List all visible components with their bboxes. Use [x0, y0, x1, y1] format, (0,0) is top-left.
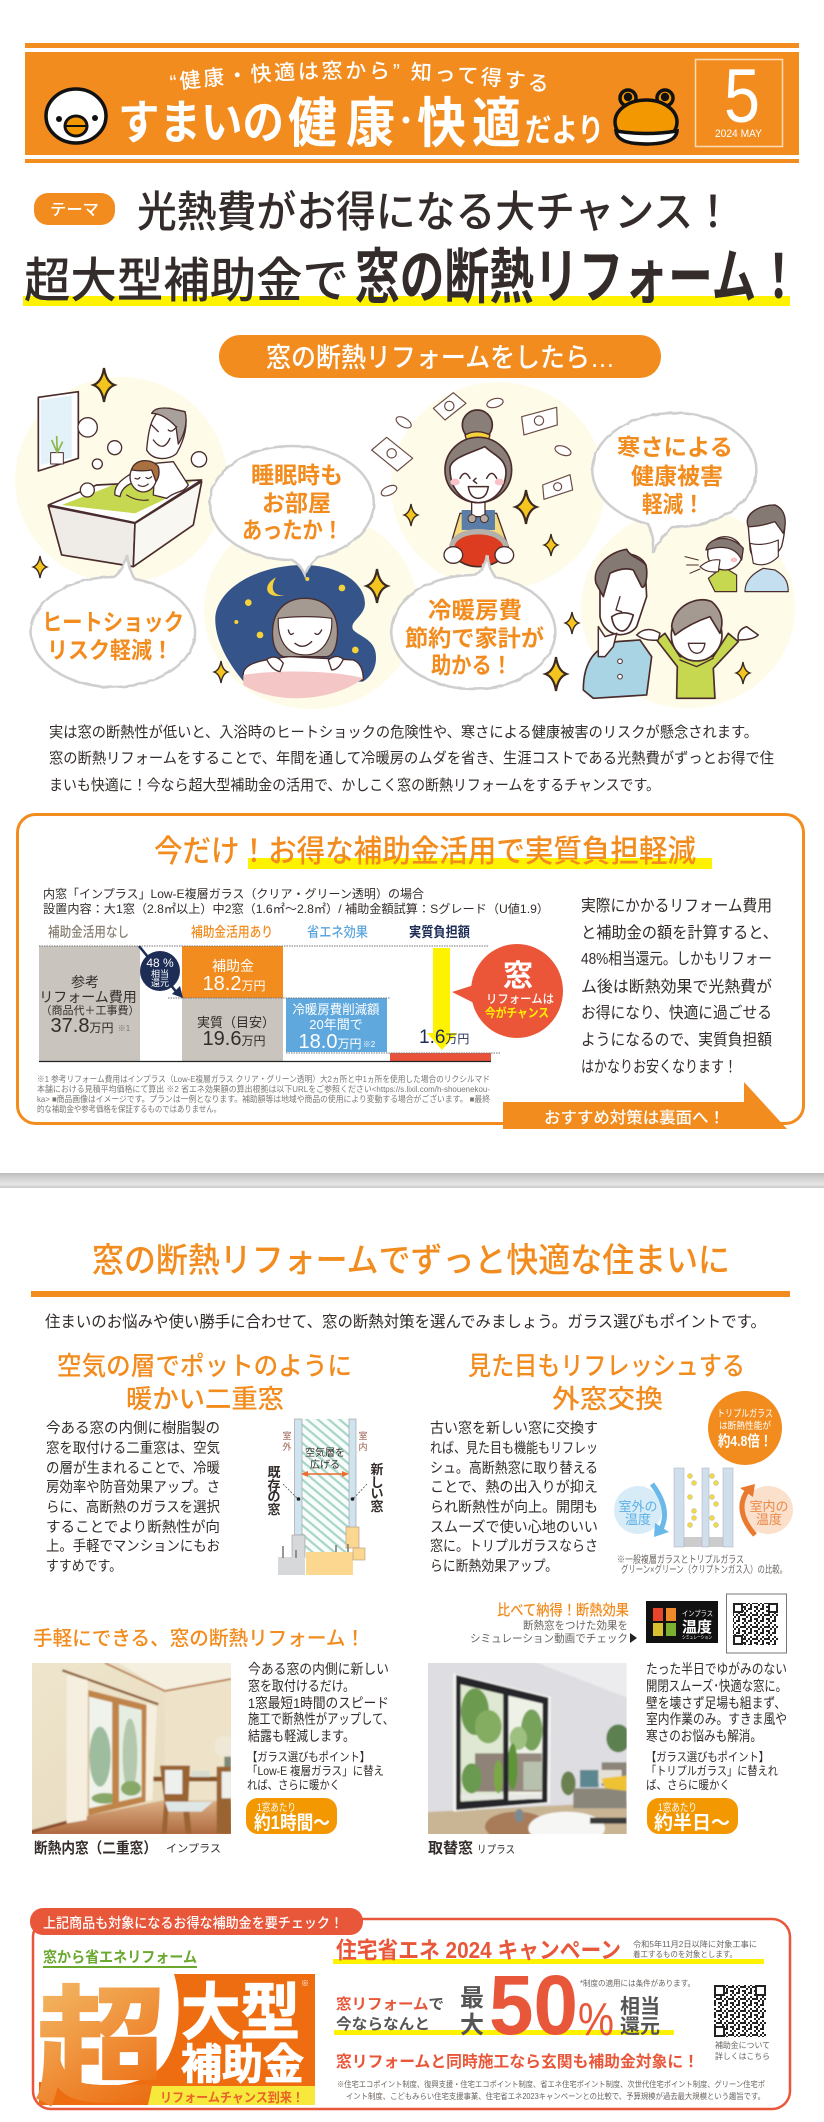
logo: inplus temperature: シミュレーション — [682, 1635, 712, 1641]
diagram: triple glass: 室内の — [749, 1499, 789, 1514]
paragraph: 今ある窓の内側に樹脂製の — [46, 1420, 220, 1437]
caption: inner window: 断熱内窓（二重窓） — [34, 1839, 157, 1857]
badge: about 1 hour: 約1時間～ — [254, 1812, 330, 1834]
50 percent callout: *制度の適用には条件があります。 — [580, 1978, 695, 1988]
bar label: energy saving: ※2 — [363, 1040, 376, 1049]
badge: about half a day: 約半日～ — [654, 1812, 730, 1834]
50 percent callout: 今ならなんと — [336, 2015, 430, 2033]
bar label: subsidy: 18.2万円 — [203, 973, 265, 995]
campaign heading: 住宅省エネ 2024 キャンペーン — [336, 1937, 621, 1963]
bar label: energy saving: 18.0万円 — [299, 1031, 361, 1053]
arrow: savings — [139, 946, 178, 994]
theme heading: テーマ — [50, 202, 99, 219]
callout: now is the chance: リフォームは — [486, 992, 554, 1006]
speech bubble: saving costs: 助かる！ — [431, 652, 512, 678]
heading: 見た目もリフレッシュする — [468, 1351, 745, 1381]
speech bubble: health damage — [592, 413, 756, 553]
paragraph: 古い窓を新しい窓に交換す — [430, 1420, 598, 1437]
caption: replacement window: 取替窓 — [428, 1839, 473, 1857]
campaign notes: イント制度、こどもみらい住宅支援事業、住宅省エネ2023キャンペーンとの比較で、予算規模が過去最大規模という趣旨です。 — [346, 2091, 765, 2101]
explanation text: と補助金の額を計算すると、 — [581, 923, 778, 942]
caption: replacement window — [428, 1839, 515, 1857]
heading: 暖かい二重窓 — [126, 1384, 284, 1414]
banner: super large subsidy: リフォームチャンス到来！ — [160, 2090, 304, 2105]
speech bubble: warm room: 睡眠時も — [251, 462, 343, 488]
comparison note: ※一般複層ガラスとトリプルガラス — [617, 1553, 744, 1566]
diagram: double window section: 室 — [282, 1430, 292, 1441]
green label: 窓から省エネリフォーム — [43, 1948, 197, 1966]
caption: inner window — [34, 1839, 221, 1857]
paragraph: の層が生まれることで、冷暖 — [46, 1460, 220, 1477]
column labels: 実質負担額 — [409, 924, 470, 940]
diagram: triple glass — [614, 1468, 793, 1547]
diagram: double window section: 既 — [267, 1465, 281, 1480]
tab heading: 上記商品も対象になるお得な補助金を要チェック！ — [43, 1915, 343, 1931]
footnotes: ※1 参考リフォーム費用はインプラス（Low-E複層ガラス クリア・グリーン透明）大2ヵ所と中1ヵ所を使用した場合のリクシルマド — [37, 1074, 490, 1084]
text: inner window: 【ガラス選びもポイント】 — [247, 1750, 370, 1764]
text: inner window: 施工で断熱性がアップして、 — [248, 1711, 394, 1727]
diagram: double window section — [267, 1419, 384, 1575]
banner: super large subsidy: ※ — [301, 1979, 309, 1988]
speech bubble: warm room: お部屋 — [262, 490, 331, 516]
paragraph: 窓を取付ける二重窓は、空気 — [46, 1440, 220, 1457]
paragraph — [430, 1420, 598, 1575]
50 percent callout: % — [578, 1993, 614, 2045]
badge: about 1 hour: 1窓あたり — [257, 1801, 296, 1814]
banner: super large subsidy: 大型 — [181, 1979, 300, 2048]
QR code with caption: 補助金について — [715, 2040, 770, 2050]
paragraph: 房効率や防音効果アップ。さ — [46, 1479, 220, 1496]
stacked cost chart — [39, 946, 500, 1062]
column: exterior window replacement — [430, 1351, 793, 1576]
bar label: reference cost: リフォーム費用 — [39, 989, 137, 1005]
footnotes: ka> ■商品画像はイメージです。プランは一例となります。補助額等は地域や商品の使用により変動する場合がございます。 ■最終 — [37, 1094, 490, 1104]
column labels: 省エネ効果 — [307, 924, 368, 940]
case description: 設置内容：大1窓（2.8㎡以上）中2窓（1.6㎡～2.8㎡）/ 補助金額試算：Sグレード（U値1.9） — [43, 901, 549, 916]
diagram: double window section: 空気層を — [305, 1446, 345, 1459]
diagram: double window section: 内 — [358, 1441, 368, 1452]
issue number box: 2024 MAY — [715, 128, 763, 140]
text: inner window: 窓を取付けるだけ。 — [248, 1678, 355, 1694]
title: すまいの — [118, 96, 284, 149]
paragraph: らに断熱効果アップ。 — [430, 1558, 558, 1575]
speech bubble: heat shock: ヒートショック — [42, 609, 184, 635]
bar label: reference cost — [39, 974, 140, 1037]
50 percent callout: 大 — [460, 2012, 484, 2039]
paragraph: ことで、熱の出入りが抑え — [430, 1479, 598, 1496]
text: replacement window: 室内作業のみ。すきま風や — [646, 1711, 787, 1727]
simulation video callout: 断熱窓をつけた効果を — [523, 1619, 628, 1632]
text: inner window: れば、さらに暖かく — [247, 1778, 340, 1792]
main headline with underline: 超大型補助金で — [24, 255, 349, 308]
banner: super large subsidy: 超 — [36, 1978, 166, 2121]
diagram: double window section: の — [267, 1489, 281, 1504]
column labels: 補助金活用なし — [48, 924, 129, 940]
50 percent callout: 窓リフォームで — [336, 1995, 444, 2013]
heading: 空気の層でポットのように — [57, 1351, 352, 1381]
paragraph: 窓に。トリプルガラスならさ — [430, 1538, 598, 1555]
campaign heading: 令和5年11月2日以降に対象工事に — [633, 1939, 757, 1949]
speech bubble: health damage: 軽減！ — [642, 491, 704, 517]
tab heading — [30, 1908, 363, 1935]
text: replacement window: 壁を壊さず足場も組まず、 — [646, 1695, 786, 1711]
speech bubble: health damage: 健康被害 — [631, 463, 723, 489]
explanation text: 実際にかかるリフォーム費用 — [581, 897, 772, 915]
banner: super large subsidy: 補助金 — [181, 2041, 304, 2088]
pill heading — [219, 335, 661, 378]
footnotes: 的な補助金や参考価格を保証するものではありません。 — [37, 1104, 221, 1114]
paragraph: すすめです。 — [46, 1558, 122, 1575]
diagram: double window section: 広げる — [310, 1459, 340, 1471]
label: 48 percent: 相当 — [151, 968, 169, 979]
text: inner window: 今ある窓の内側に新しい — [248, 1661, 389, 1677]
diagram: double window section: 窓 — [267, 1502, 281, 1517]
heading: 外窓交換 — [552, 1384, 663, 1414]
campaign heading: 着工するものを対象とします。 — [633, 1949, 737, 1959]
diagram: double window section: 外 — [282, 1441, 292, 1452]
header banner — [25, 43, 799, 163]
bar label: net burden: 1.6万円 — [419, 1027, 469, 1048]
speech bubble: heat shock: リスク軽減！ — [47, 637, 173, 663]
badge: about half a day: 1窓あたり — [658, 1801, 697, 1814]
main headline with underline — [23, 244, 801, 311]
explanation text — [581, 897, 778, 1076]
badge: about half a day — [647, 1798, 738, 1834]
diagram: double window section: し — [370, 1475, 384, 1490]
title: 快 — [417, 94, 466, 154]
section heading: easy reform: 手軽にできる、窓の断熱リフォーム！ — [33, 1627, 365, 1650]
text: replacement window: 【ガラス選びもポイント】 — [646, 1750, 769, 1764]
badge: about 1 hour — [246, 1798, 337, 1834]
bar label: energy saving: 冷暖房費削減額 — [292, 1002, 380, 1017]
50 percent callout — [334, 1958, 695, 2052]
badge: 4.8 times: 約4.8倍！ — [718, 1432, 772, 1450]
paragraph: スムーズで使い心地のいい — [430, 1519, 598, 1536]
title — [118, 94, 604, 154]
paragraph: 上。手軽でマンションにもお — [46, 1538, 220, 1555]
explanation text: はかなりお安くなります！ — [581, 1058, 737, 1076]
speech bubble: saving costs: 節約で家計が — [405, 625, 544, 651]
label: 48 percent: 48 % — [146, 956, 174, 970]
callout: now is the chance — [452, 944, 563, 1038]
issue number box: 5 — [724, 54, 760, 139]
badge: 4.8 times: トリプルガラス — [717, 1408, 773, 1420]
logo: inplus temperature: インプラス — [682, 1609, 713, 1618]
diagram: double window section: 新 — [370, 1462, 384, 1477]
diagram: triple glass: 温度 — [625, 1512, 651, 1527]
pill heading: 窓の断熱リフォームをしたら… — [266, 343, 615, 373]
diagram: triple glass: 温度 — [756, 1512, 782, 1527]
QR code with caption — [714, 1985, 770, 2061]
text: inner window: 1窓最短1時間のスピード — [248, 1695, 389, 1711]
explanation text: お得になり、快適に過ごせる — [581, 1004, 772, 1022]
case description — [43, 887, 549, 916]
headline line 1: 光熱費がお得になる大チャンス！ — [137, 189, 733, 237]
logo: inplus temperature — [646, 1601, 718, 1643]
campaign notes: ※住宅エコポイント制度、復興支援・住宅エコポイント制度、省エネ住宅ポイント制度、次世代住宅ポイント制度、グリーン住宅ポ — [337, 2079, 765, 2089]
bar label: reference cost: ※1 — [118, 1024, 131, 1033]
paragraph: シュ。高断熱窓に取り替える — [430, 1460, 598, 1477]
explanation text: 48%相当還元。しかもリフォー — [581, 950, 772, 968]
title: 適 — [472, 94, 521, 154]
column labels: 補助金活用あり — [191, 924, 273, 940]
intro paragraph: 実は窓の断熱性が低いと、入浴時のヒートショックの危険性や、寒さによる健康被害のリスクが懸念されます。 — [49, 724, 758, 741]
heading — [57, 1351, 352, 1414]
text: inner window — [246, 1661, 394, 1834]
diagram: triple glass: 室外の — [618, 1499, 658, 1514]
intro paragraph — [49, 724, 774, 794]
theme heading — [34, 189, 733, 237]
bar label: effective cost: 19.6万円 — [203, 1028, 265, 1050]
entrance subsidy line: 窓リフォームと同時施工なら玄関も補助金対象に！ — [336, 2052, 699, 2071]
label: 48 percent: 還元 — [151, 977, 169, 988]
callout: now is the chance: 今がチャンス — [485, 1005, 549, 1020]
speech bubble: warm room: あったか！ — [242, 517, 343, 543]
illustration: sleeping girl at night — [215, 565, 376, 698]
text: replacement window: 「トリプルガラス」に替えれ — [646, 1764, 778, 1778]
speech bubble: saving costs: 冷暖房費 — [428, 597, 522, 623]
text: replacement window — [646, 1661, 787, 1834]
title: だより — [525, 112, 604, 148]
title: 康 — [346, 94, 395, 154]
intro paragraph: まいも快適に！今なら超大型補助金の活用で、かしこく窓の断熱リフォームをするチャンスです。 — [49, 777, 660, 794]
text: replacement window: ば、さらに暖かく — [646, 1778, 730, 1792]
bar label: subsidy — [203, 958, 265, 995]
case description: 内窓「インプラス」Low-E複層ガラス（クリア・グリーン透明）の場合 — [43, 887, 424, 901]
section heading: comfortable living — [31, 1242, 790, 1297]
label: 48 percent — [140, 951, 180, 991]
section heading: comfortable living: 窓の断熱リフォームでずっと快適な住まいに — [92, 1242, 730, 1280]
panel: subsidy cost breakdown — [18, 814, 804, 1129]
text: replacement window: 寒さのお悩みも解消。 — [646, 1728, 762, 1744]
caption: replacement window: リプラス — [477, 1843, 515, 1856]
bar label: energy saving — [292, 1002, 380, 1053]
speech bubble: health damage: 寒さによる — [617, 434, 733, 460]
arrow: net burden — [427, 948, 457, 1050]
50 percent callout: 最 — [460, 1985, 484, 2012]
caption: inner window: インプラス — [166, 1842, 221, 1855]
curved subtitle: “健康・快適は窓から” 知って得する — [170, 60, 546, 92]
text: inner window: 結露も軽減します。 — [248, 1728, 355, 1744]
intro paragraph: 窓の断熱リフォームをすることで、年間を通して冷暖房のムダを省き、生涯コストである光熱費がずっとお得で住 — [49, 750, 774, 767]
arrow tab: see reverse side — [503, 1082, 787, 1129]
panel heading: 今だけ！お得な補助金活用で実質負担軽減 — [154, 834, 696, 869]
simulation video callout: シミュレーション動画でチェック — [470, 1631, 628, 1645]
QR code — [726, 1594, 786, 1653]
footnotes — [37, 1074, 490, 1114]
column: double window — [46, 1351, 384, 1575]
bar label: reference cost: 参考 — [71, 974, 99, 990]
photo: inner window room — [32, 1663, 231, 1834]
speech bubble: saving costs — [391, 555, 555, 689]
50 percent callout: 相当 — [620, 1995, 660, 2018]
illustration: bath — [38, 392, 207, 567]
simulation video callout — [470, 1594, 786, 1653]
title: 健 — [288, 94, 337, 154]
QR code with caption: 詳しくはこちら — [715, 2051, 770, 2061]
simulation video callout: 比べて納得！断熱効果 — [497, 1602, 629, 1619]
photo: replacement window room — [428, 1663, 627, 1834]
diagram: double window section: い — [370, 1486, 384, 1501]
comparison note — [617, 1553, 787, 1576]
explanation text: ようになるので、実質負担額 — [581, 1031, 772, 1049]
diagram: double window section: 窓 — [370, 1499, 384, 1514]
illustration: woman with purse and money — [372, 393, 573, 567]
background circles — [15, 377, 795, 709]
callout: now is the chance: 窓 — [503, 960, 533, 993]
paragraph: られ断熱性が向上。開閉も — [430, 1499, 598, 1516]
bar label: subsidy: 補助金 — [212, 958, 254, 974]
diagram: double window section: 室 — [358, 1430, 368, 1441]
section intro: 住まいのお悩みや使い勝手に合わせて、窓の断熱対策を選んでみましょう。ガラス選びもポイントです。 — [45, 1313, 766, 1331]
paragraph: することでより断熱性が向 — [46, 1519, 220, 1536]
column labels — [48, 924, 470, 940]
text: replacement window: 開閉スムーズ･快適な窓に。 — [646, 1678, 787, 1694]
issue number box — [696, 54, 782, 146]
speech bubble: heat shock — [31, 555, 195, 687]
illustration: family and sick people — [583, 505, 788, 698]
speech bubble: warm room — [210, 446, 374, 575]
icon: duck — [46, 89, 106, 143]
panel: subsidy campaign — [30, 1908, 790, 2121]
50 percent callout: 還元 — [620, 2015, 660, 2038]
text: replacement window: たった半日でゆがみのない — [646, 1661, 787, 1677]
bar label: effective cost: 実質（目安） — [197, 1015, 275, 1030]
paragraph: れば、見た目も機能もリフレッ — [430, 1440, 598, 1457]
50 percent callout: 50 — [489, 1958, 578, 2052]
diagram: double window section: 存 — [267, 1478, 281, 1493]
campaign notes — [337, 2079, 765, 2101]
heading — [468, 1351, 745, 1414]
banner: super large subsidy — [36, 1974, 315, 2121]
arrow tab: see reverse side: おすすめ対策は裏面へ！ — [544, 1108, 725, 1127]
bar label: reference cost: 37.8万円 — [51, 1015, 113, 1037]
text: inner window: 「Low-E 複層ガラス」に替え — [247, 1764, 384, 1778]
paragraph — [46, 1420, 220, 1575]
badge: 4.8 times: は断熱性能が — [719, 1420, 771, 1432]
bar label: reference cost: （商品代＋工事費） — [40, 1003, 140, 1017]
bar label: effective cost — [197, 1015, 275, 1050]
paragraph: らに、高断熱のガラスを選択 — [46, 1499, 220, 1516]
icon: frog — [615, 90, 677, 144]
sparkles — [33, 368, 750, 691]
badge: 4.8 times — [708, 1391, 782, 1465]
logo: inplus temperature: 温度 — [682, 1618, 712, 1636]
bar label: energy saving: 20年間で — [309, 1017, 363, 1032]
footnotes: 本舗における見積平均価格にて算出 ※2 省エネ効果額の算出根拠は以下URLをご参照ください<https://s.lixil.com/h-shouenekou- — [37, 1084, 490, 1094]
explanation text: ム後は断熱効果で光熱費が — [581, 978, 772, 996]
